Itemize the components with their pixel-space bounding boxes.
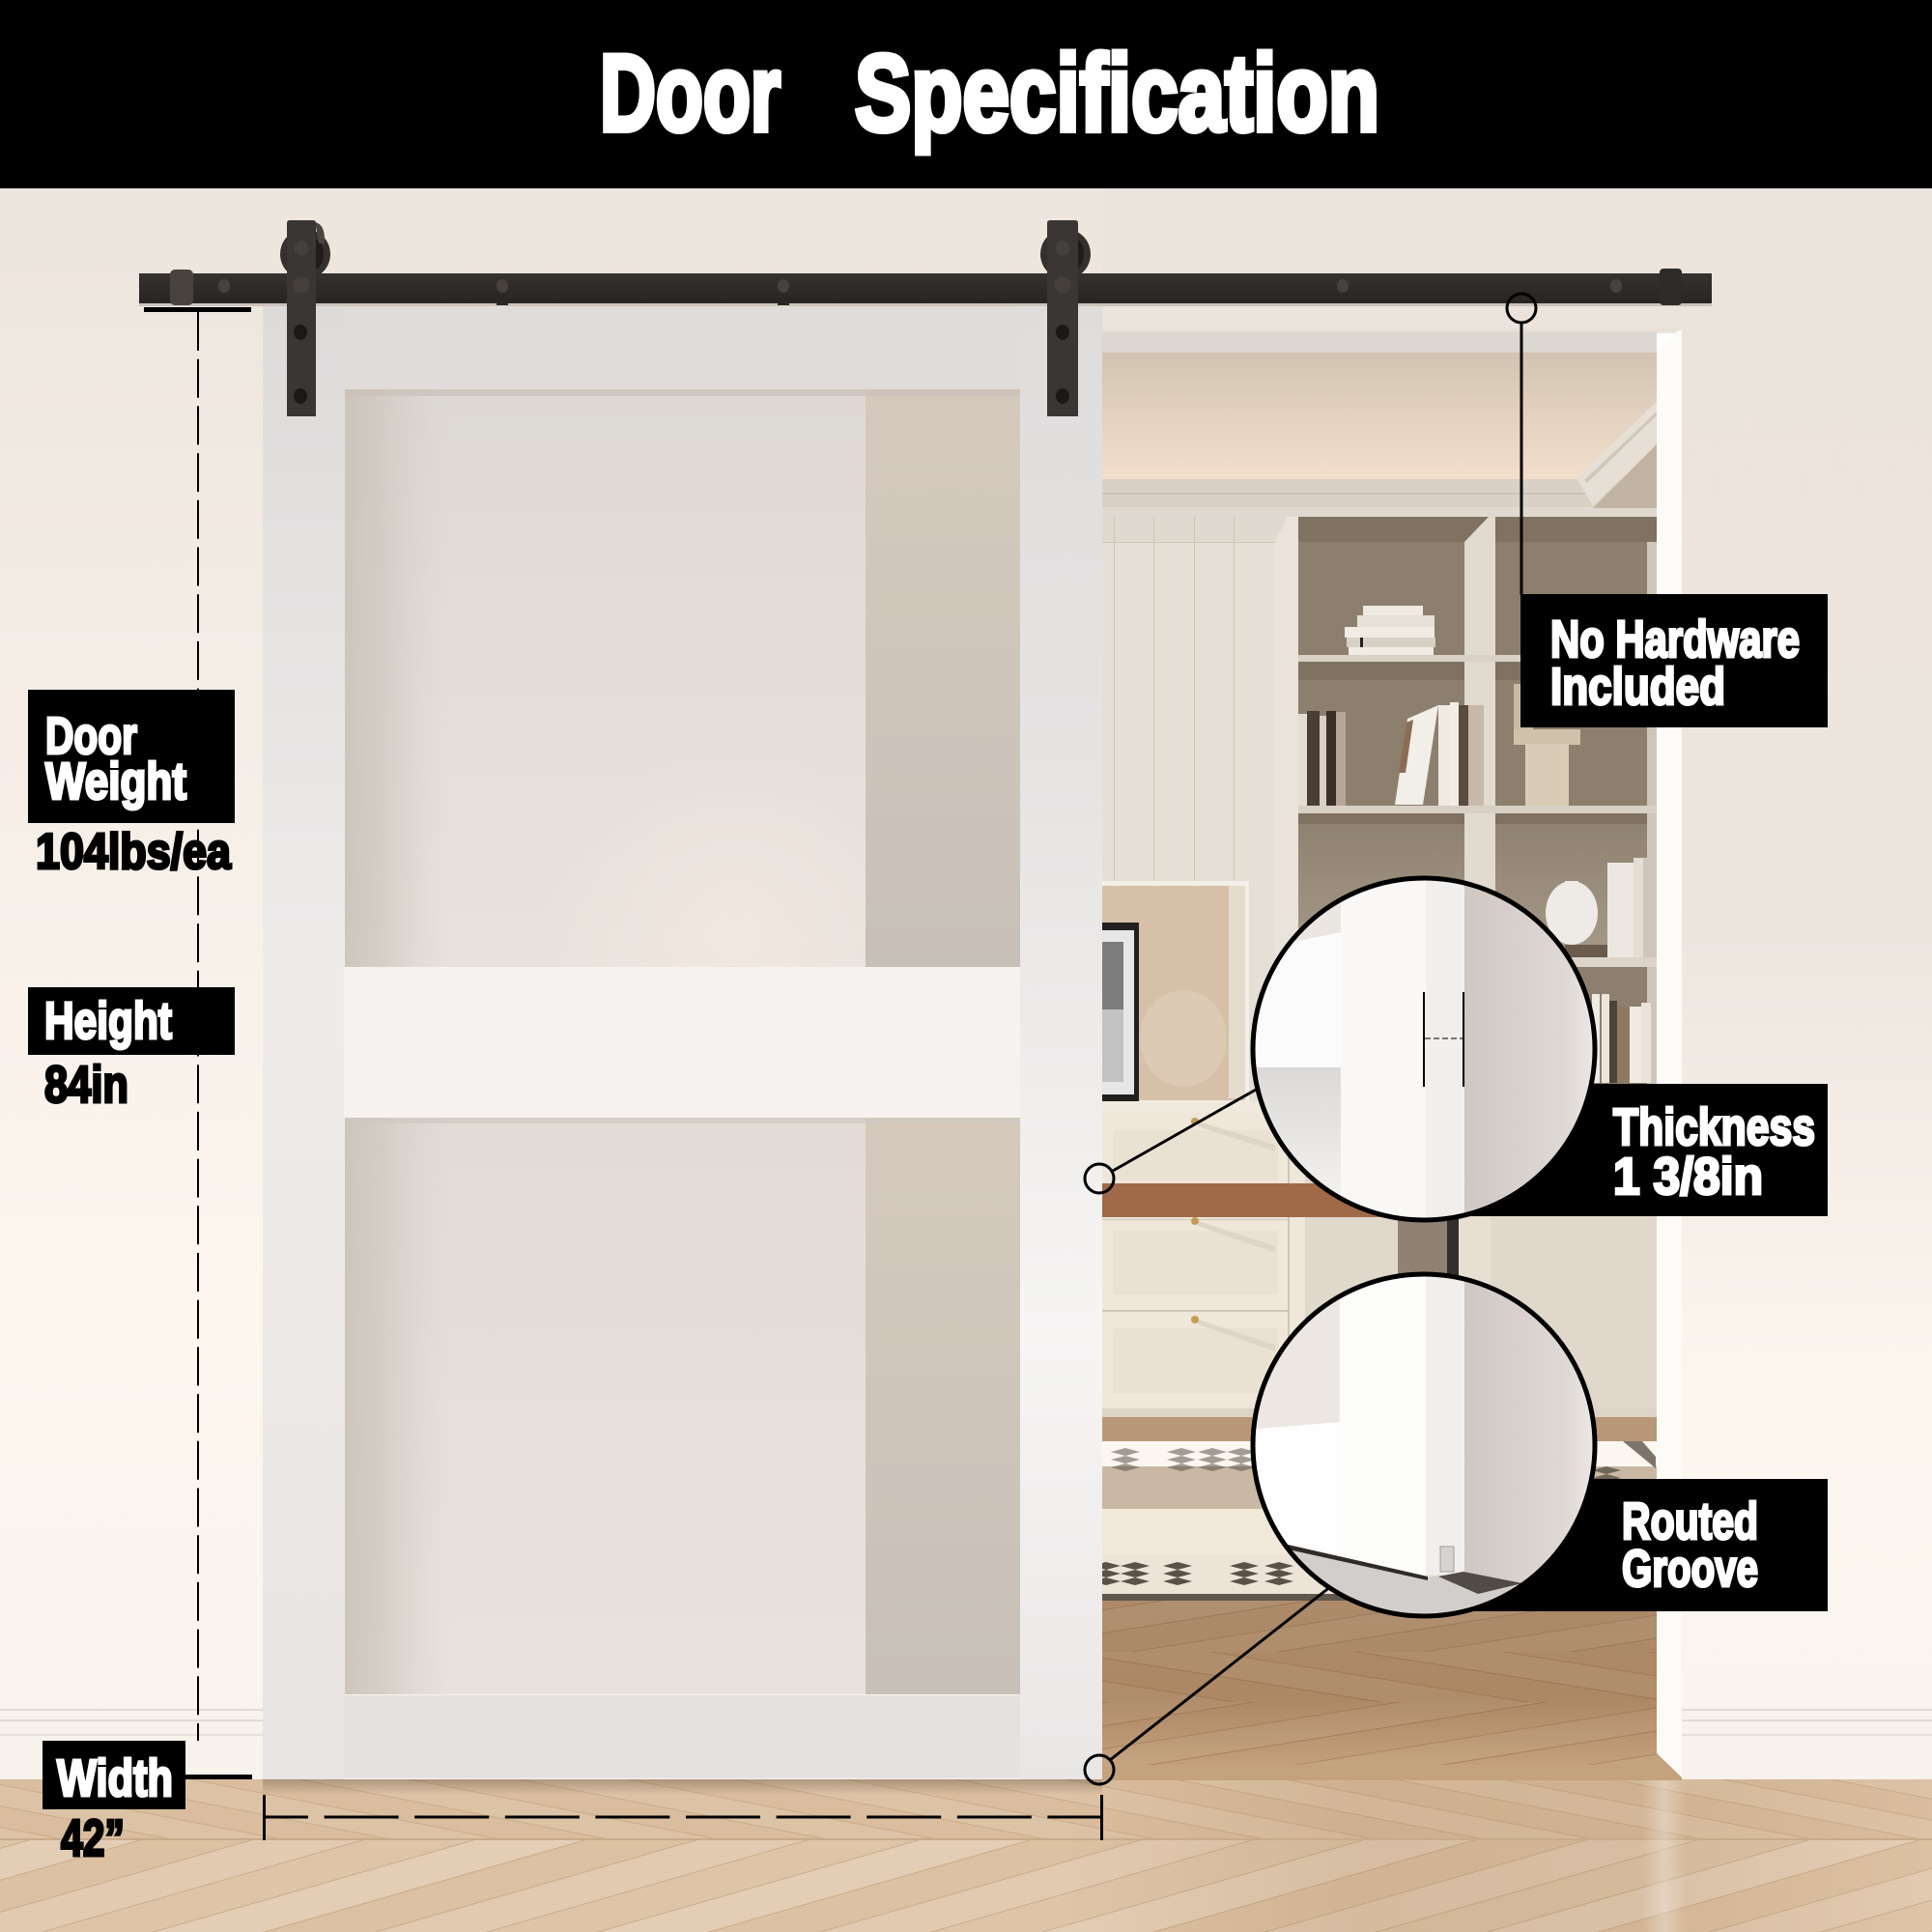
width label: Width — [57, 1749, 173, 1807]
width label — [43, 1741, 185, 1867]
left hanger strap — [280, 220, 330, 416]
thickness label text: 1 3/8in — [1613, 1148, 1763, 1206]
vase and lower books — [1546, 858, 1657, 1083]
barn door — [263, 306, 1102, 1779]
middle rail — [344, 967, 1020, 1118]
wooden desk top — [1102, 1183, 1402, 1217]
stacked books — [1345, 606, 1435, 655]
callout leader: no hardware — [1507, 294, 1536, 595]
door weight label: 104lbs/ea — [36, 824, 232, 880]
floor — [0, 1779, 1932, 1932]
height label — [28, 987, 235, 1114]
width leader line — [185, 1775, 252, 1779]
width label: 42” — [61, 1809, 125, 1867]
room seen through the doorway — [1092, 330, 1682, 1780]
sliding track rail — [139, 269, 1712, 306]
ceiling — [1102, 330, 1657, 480]
rail bolts — [218, 279, 1622, 305]
door weight label: Weight — [45, 753, 186, 810]
title bar — [0, 0, 1932, 188]
track stopper right — [1660, 269, 1682, 305]
detail circle: thickness — [1246, 869, 1609, 1232]
upper panel — [345, 389, 1020, 967]
bookshelf — [1275, 517, 1657, 1122]
bottom rail — [344, 1695, 1020, 1778]
routed groove label text: Routed — [1622, 1492, 1758, 1550]
callout leader: routed groove — [1085, 1586, 1331, 1784]
height label: Height — [44, 992, 172, 1050]
upright books left — [1298, 711, 1346, 806]
room floor and rug — [1092, 1408, 1682, 1780]
thickness label box — [1468, 1084, 1828, 1216]
routed groove label box — [1468, 1479, 1828, 1611]
callout leader: thickness — [1085, 1090, 1256, 1193]
thickness label text: Thickness — [1613, 1098, 1815, 1156]
door frame right jamb — [1102, 328, 1682, 1777]
detail circle: routed groove — [1250, 1271, 1598, 1619]
leaning and upright books right — [1395, 702, 1484, 806]
width dimension line — [263, 1795, 1103, 1840]
routed groove label text: Groove — [1622, 1540, 1758, 1598]
no hardware label: Included — [1550, 658, 1725, 716]
crown moulding — [1102, 402, 1657, 544]
no hardware label: No Hardware — [1550, 611, 1800, 668]
top rail — [344, 306, 1020, 389]
paneled wall — [1102, 517, 1276, 1122]
lower cabinets — [1102, 1101, 1657, 1415]
thickness marker — [1423, 992, 1464, 1087]
title: Door — [600, 33, 781, 154]
height dimension line — [144, 307, 251, 1741]
sculpture — [1514, 684, 1580, 806]
door weight label — [28, 690, 235, 880]
lower panel — [345, 1118, 1020, 1694]
track stopper left — [170, 270, 193, 305]
door weight label: Door — [45, 707, 137, 765]
title: Specification — [855, 33, 1379, 154]
baseboards — [0, 1708, 1932, 1780]
door stiles — [263, 306, 1102, 1779]
height label: 84in — [44, 1056, 128, 1114]
no hardware label — [1520, 594, 1828, 727]
right hanger strap — [1040, 220, 1091, 416]
artwork — [1102, 881, 1249, 1101]
